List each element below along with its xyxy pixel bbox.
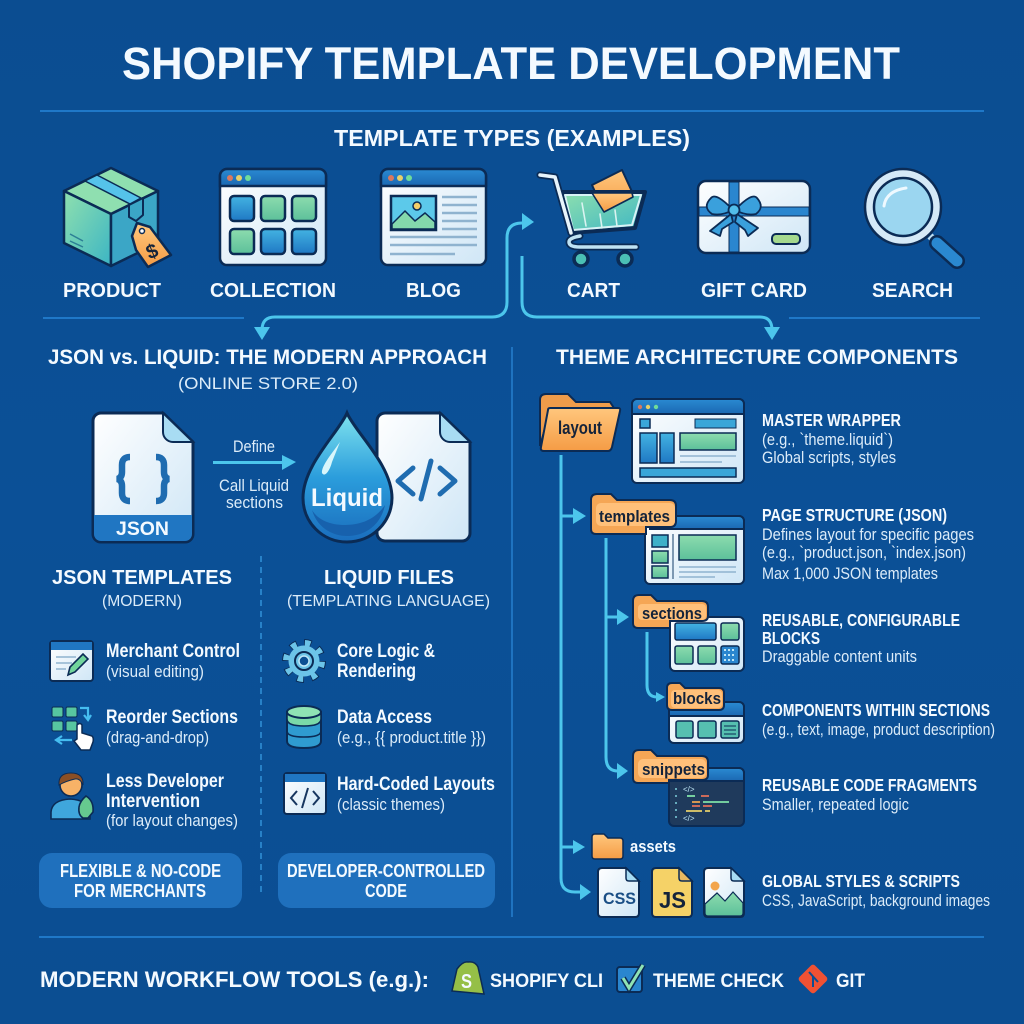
arrow: define: sections	[226, 493, 283, 512]
text: dollar sign on tag: $	[143, 240, 162, 264]
button: flexible no-code	[39, 853, 242, 908]
window: blocks	[669, 702, 744, 743]
icon: git	[797, 963, 829, 995]
button: developer-controlled	[278, 853, 495, 908]
item: less developer intervention	[51, 771, 238, 830]
text: reusable code fragments: Smaller, repeated logic	[762, 796, 909, 814]
heading: theme architecture: THEME ARCHITECTURE COMPONENTS	[556, 346, 958, 369]
button: developer-controlled: CODE	[365, 881, 407, 901]
text: master wrapper: (e.g., `theme.liquid`)	[762, 431, 893, 449]
heading: template types: TEMPLATE TYPES (EXAMPLES)	[334, 125, 690, 151]
icon: gift card	[698, 181, 810, 253]
item: hard-coded layouts: (classic themes)	[337, 795, 445, 814]
arrow: define: Call Liquid	[219, 476, 289, 495]
button: developer-controlled: DEVELOPER-CONTROLLED	[287, 861, 485, 881]
folder: assets	[592, 834, 676, 859]
heading: workflow tools: MODERN WORKFLOW TOOLS (e.g.):	[40, 967, 429, 992]
window: page structure	[645, 516, 744, 584]
icon: product box	[64, 168, 171, 267]
icon: JS file: JS	[659, 887, 686, 913]
text: reusable blocks: REUSABLE, CONFIGURABLE	[762, 610, 960, 630]
folder: blocks: blocks	[673, 689, 721, 708]
icon: JS file	[652, 868, 692, 917]
labels: template names: BLOG	[406, 280, 461, 302]
icon: image file	[704, 868, 744, 917]
item: merchant control: Merchant Control	[106, 641, 240, 662]
icon: Liquid drop	[303, 413, 392, 542]
labels: template names: PRODUCT	[63, 280, 161, 302]
text: page structure: Max 1,000 JSON templates	[762, 565, 938, 583]
arrow: define: Define	[233, 437, 275, 456]
icon: search magnifier	[865, 169, 957, 261]
window: code snippets	[669, 768, 744, 826]
item: reorder sections: (drag-and-drop)	[106, 728, 209, 747]
item: data access: (e.g., {{ product.title }})	[337, 728, 486, 747]
labels: template names: SEARCH	[872, 280, 953, 302]
icon: JSON file	[93, 413, 193, 542]
labels: template names: CART	[567, 280, 620, 302]
item: data access: Data Access	[337, 707, 432, 728]
folder: templates	[591, 494, 676, 534]
panel: template types row	[63, 168, 957, 302]
heading: Liquid files: LIQUID FILES	[324, 567, 454, 589]
text: master wrapper	[762, 410, 901, 467]
item: merchant control	[50, 641, 240, 681]
text: components within sections	[762, 700, 995, 739]
text: page structure: PAGE STRUCTURE (JSON)	[762, 505, 947, 525]
icon: cart	[540, 170, 645, 266]
icon: CSS file	[598, 868, 639, 917]
subheading: modern: (MODERN)	[102, 593, 182, 610]
item: hard-coded layouts	[284, 773, 495, 814]
text: page structure	[762, 505, 974, 583]
text: reusable code fragments	[762, 775, 977, 814]
labels: template names: GIFT CARD	[701, 280, 807, 302]
icon: Liquid drop: Liquid	[311, 484, 383, 512]
item: core logic	[286, 641, 435, 682]
icon: Shopify bag	[452, 962, 484, 994]
button: flexible no-code: FLEXIBLE & NO-CODE	[60, 861, 221, 881]
icon: blog window	[381, 169, 486, 265]
item: less developer intervention: Intervention	[106, 791, 200, 812]
item: hard-coded layouts: Hard-Coded Layouts	[337, 774, 495, 795]
icon: JSON file: JSON	[116, 519, 169, 540]
icon: theme check	[617, 965, 643, 992]
panel: workflow tools	[40, 962, 865, 995]
item: merchant control: (visual editing)	[106, 662, 204, 681]
folder: snippets	[633, 750, 708, 783]
item: less developer intervention: (for layout changes)	[106, 811, 238, 830]
text: master wrapper: MASTER WRAPPER	[762, 410, 901, 430]
icon: Shopify bag: S	[461, 971, 472, 993]
title: SHOPIFY TEMPLATE DEVELOPMENT	[122, 38, 900, 89]
folder: snippets: snippets	[642, 760, 705, 779]
tree connectors	[561, 455, 665, 900]
window: code snippets: </>	[683, 814, 695, 823]
panel: JSON vs Liquid	[39, 346, 495, 908]
icon: collection window	[220, 169, 326, 265]
item: less developer intervention: Less Developer	[106, 771, 225, 792]
text: reusable blocks: Draggable content units	[762, 648, 917, 666]
subheading: online store: (ONLINE STORE 2.0)	[178, 374, 358, 393]
item: core logic: Core Logic &	[337, 641, 435, 662]
folder: layout: layout	[558, 418, 602, 438]
arrow: to theme architecture section	[522, 256, 780, 340]
text: master wrapper: Global scripts, styles	[762, 449, 896, 467]
button: flexible no-code: FOR MERCHANTS	[74, 881, 206, 901]
icon: Liquid file	[377, 413, 470, 541]
label: Theme Check: THEME CHECK	[653, 971, 784, 992]
item: reorder sections: Reorder Sections	[106, 707, 238, 728]
heading: JSON vs Liquid: JSON vs. LIQUID: THE MODERN APPROACH	[48, 346, 487, 369]
text: page structure: Defines layout for specific pages	[762, 526, 974, 544]
item: data access	[287, 706, 486, 748]
window: code snippets: </>	[683, 785, 695, 794]
label: Git: GIT	[836, 971, 865, 992]
folder: layout	[540, 394, 620, 451]
folder: sections	[633, 595, 708, 628]
text: global styles	[762, 871, 990, 910]
labels: template names: COLLECTION	[210, 280, 336, 302]
folder: blocks	[667, 683, 724, 710]
folder: sections: sections	[642, 604, 702, 623]
arrow: define	[213, 437, 296, 512]
text: reusable blocks: BLOCKS	[762, 628, 820, 648]
arrow: to JSON vs Liquid section and cart	[254, 213, 534, 340]
text: page structure: (e.g., `product.json, `index.json)	[762, 544, 966, 562]
window: master wrapper	[632, 399, 744, 483]
heading: JSON templates: JSON TEMPLATES	[52, 567, 232, 589]
text: reusable code fragments: REUSABLE CODE FRAGMENTS	[762, 775, 977, 795]
icon: CSS file: CSS	[603, 889, 636, 908]
text: reusable blocks	[762, 610, 960, 666]
label: Shopify CLI: SHOPIFY CLI	[490, 971, 603, 992]
item: core logic: Rendering	[337, 661, 416, 682]
subheading: templating language: (TEMPLATING LANGUAGE)	[287, 593, 490, 610]
text: global styles: GLOBAL STYLES & SCRIPTS	[762, 871, 960, 891]
folder: templates: templates	[599, 507, 670, 526]
folder: assets: assets	[630, 837, 676, 856]
labels: template names	[63, 280, 953, 302]
window: sections grid	[670, 617, 744, 671]
panel: theme architecture	[540, 346, 995, 917]
item: reorder sections	[52, 707, 238, 750]
